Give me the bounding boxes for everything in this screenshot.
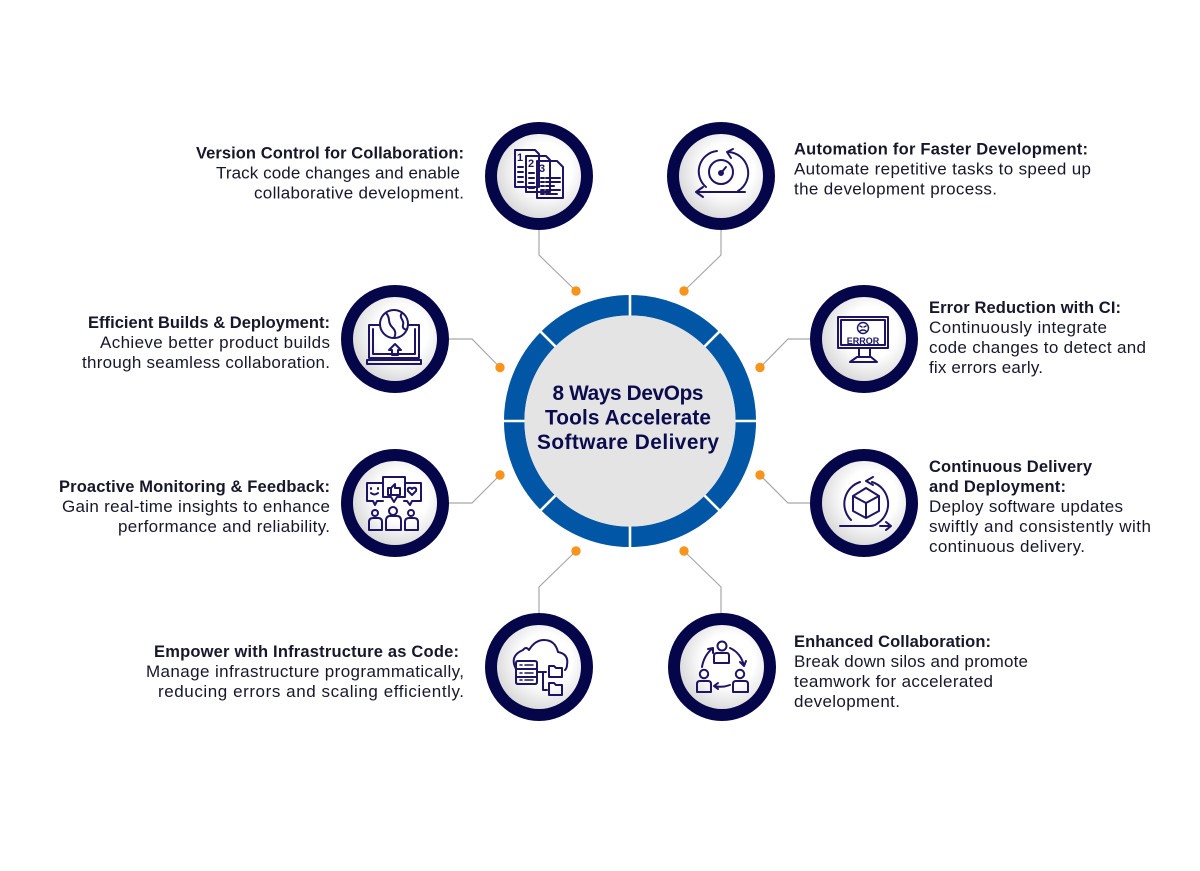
text: continuous delivery: Continuous Delivery <box>929 458 1093 476</box>
icon: numbered documents: 3 <box>539 163 545 175</box>
icon: feedback people <box>367 477 421 530</box>
text: infrastructure as code: Empower with Infrastructure as Code: <box>154 643 459 661</box>
text: infrastructure as code: Manage infrastructure programmatically, <box>146 662 464 681</box>
text: automation: Automation for Faster Development: <box>794 140 1088 158</box>
hub title: 8 Ways DevOps <box>552 382 704 405</box>
text: continuous delivery: continuous delivery. <box>929 537 1085 556</box>
connector <box>449 339 505 372</box>
icon: error monitor: ERROR <box>847 336 880 346</box>
badge <box>485 122 593 230</box>
badge <box>341 285 449 393</box>
text: monitoring: performance and reliability. <box>118 517 330 536</box>
text: efficient builds <box>82 314 330 372</box>
connector <box>539 230 581 296</box>
text: monitoring <box>59 478 330 536</box>
badge <box>485 613 593 721</box>
icon: cloud servers <box>514 640 567 695</box>
text: error reduction <box>929 299 1146 377</box>
icon: laptop with globe <box>367 310 421 364</box>
badge <box>341 449 449 557</box>
text: efficient builds: Efficient Builds & Deployment: <box>88 314 330 332</box>
text: version control: Track code changes and enable <box>216 164 460 182</box>
hub disc <box>524 315 736 527</box>
panel: collaboration <box>668 546 1028 721</box>
icon: numbered documents: 2 <box>528 158 534 170</box>
text: monitoring: Gain real-time insights to enhance <box>62 497 330 516</box>
text: error reduction: Error Reduction with CI: <box>929 299 1121 317</box>
connector <box>539 546 581 613</box>
icon: cube cycle <box>840 477 891 530</box>
panel: automation <box>667 122 1091 296</box>
text: error reduction: fix errors early. <box>929 358 1043 377</box>
text: automation: Automate repetitive tasks to speed up <box>794 160 1091 178</box>
icon: numbered documents <box>515 150 563 198</box>
badge <box>667 122 775 230</box>
badge <box>668 613 776 721</box>
text: automation: the development process. <box>794 180 997 198</box>
text: collaboration: Enhanced Collaboration: <box>794 633 991 651</box>
text: version control <box>196 144 464 202</box>
connector <box>679 546 721 613</box>
text: continuous delivery <box>929 458 1151 556</box>
text: infrastructure as code: reducing errors and scaling efficiently. <box>158 682 464 701</box>
badge <box>810 285 918 393</box>
connector <box>755 339 810 372</box>
icon: team cycle <box>697 642 748 692</box>
panel: efficient builds <box>82 285 505 393</box>
text: monitoring: Proactive Monitoring & Feedback: <box>59 478 330 496</box>
panel: infrastructure as code <box>146 546 593 721</box>
panel: error reduction <box>755 285 1146 393</box>
text: efficient builds: through seamless collaboration. <box>82 353 330 372</box>
connector <box>679 230 721 296</box>
panel: monitoring <box>59 449 505 557</box>
icon: stopwatch cycle <box>696 149 748 197</box>
panel: continuous delivery <box>755 449 1151 557</box>
text: infrastructure as code <box>146 643 464 701</box>
icon: error monitor <box>838 317 888 362</box>
segmented blue ring <box>501 292 759 550</box>
text: version control: collaborative development. <box>254 184 464 202</box>
text: collaboration <box>794 633 1028 711</box>
hub title: Software Delivery <box>537 431 719 454</box>
hub title: Tools Accelerate <box>545 406 711 430</box>
text: continuous delivery: and Deployment: <box>929 478 1066 496</box>
central hub <box>501 292 759 550</box>
badge <box>810 449 918 557</box>
text: error reduction: code changes to detect and <box>929 338 1146 357</box>
text: continuous delivery: swiftly and consistently with <box>929 517 1151 536</box>
text: collaboration: Break down silos and promote <box>794 652 1028 671</box>
text: efficient builds: Achieve better product builds <box>100 333 330 352</box>
connector <box>449 470 505 503</box>
text: error reduction: Continuously integrate <box>929 318 1107 337</box>
text: collaboration: teamwork for accelerated <box>794 672 993 691</box>
panel: version control <box>196 122 593 296</box>
connector <box>755 470 810 503</box>
text: version control: Version Control for Collaboration: <box>196 144 464 162</box>
text: automation <box>794 140 1091 198</box>
text: continuous delivery: Deploy software updates <box>929 497 1123 516</box>
text: collaboration: development. <box>794 692 900 711</box>
icon: numbered documents: 1 <box>517 152 523 164</box>
